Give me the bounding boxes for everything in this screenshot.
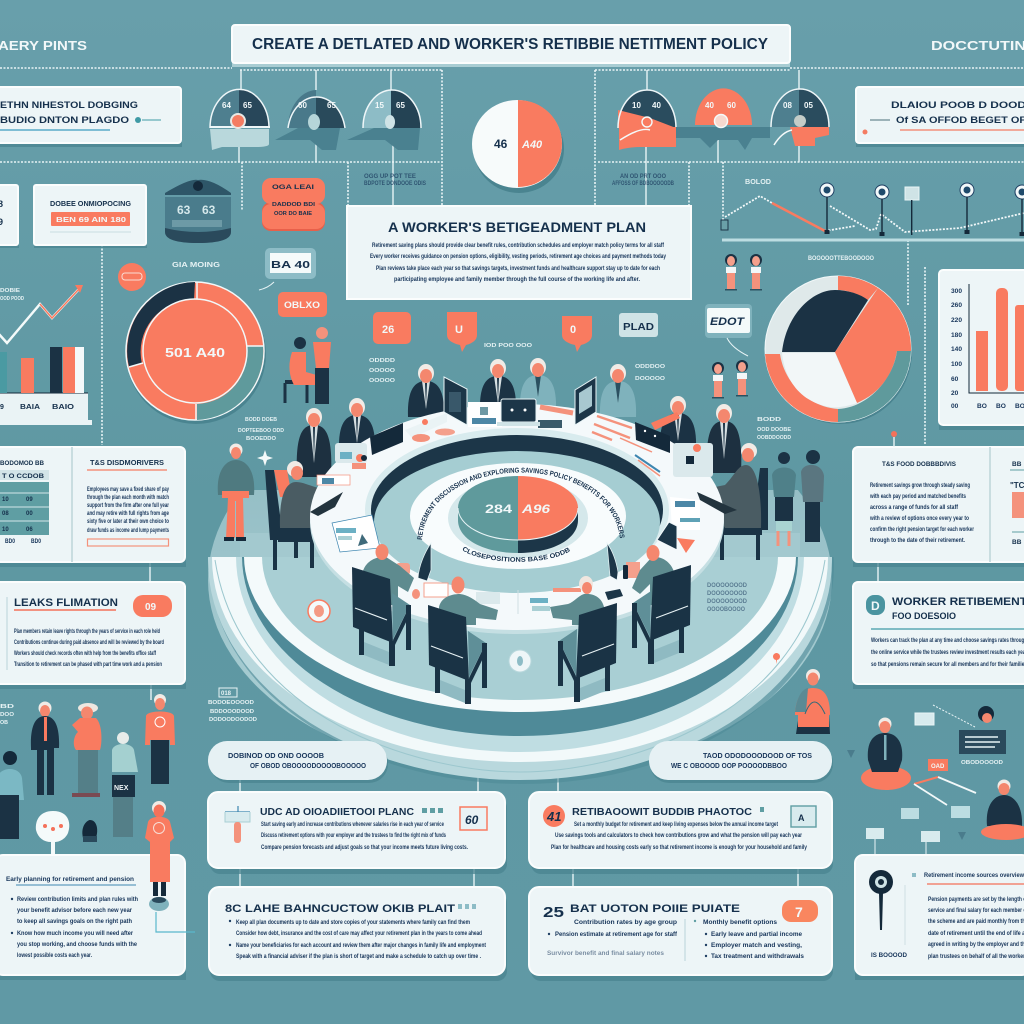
pie chart: right: BOOOOOTTEBOODOOO — [808, 255, 874, 262]
panel: top right note — [856, 87, 1024, 147]
panel: lower left bullets: you stop working, and choose funds with the — [17, 941, 137, 948]
caption: top centre left: BDPOTE DONDOOE ODIS — [364, 180, 426, 187]
chart: left bars and trend: 9 — [0, 404, 4, 411]
centre ring text: RETIREMENT DISCUSSION AND EXPLORING SAVINGS POLICY BENEFITS FOR WORKERS — [417, 468, 624, 540]
icon: dome gauge 5 — [676, 88, 770, 150]
icon: small people mid right — [712, 360, 748, 398]
panel: lower left bullets: Early planning for retirement and pension — [6, 876, 134, 883]
figures: seated meditation group lower right — [861, 705, 1024, 840]
panel: leave flimation: Workers should check records often with help from the benefits office staff — [14, 650, 156, 657]
panel: left table and notes: T&S DISDMORIVERS — [90, 460, 164, 467]
panel: central plan — [347, 206, 691, 299]
panel: left table and notes: BD0 — [31, 538, 41, 545]
panel: basic pension update: Tax treatment and withdrawals — [711, 953, 804, 960]
icon: safe: 63 — [177, 203, 191, 217]
corner label left: AERY PINTS — [0, 38, 87, 53]
panel: left table and notes: Employees may save a fixed share of pay — [87, 486, 169, 493]
chart: left bars and trend — [0, 285, 92, 425]
icon: dome gauge 1 — [210, 89, 270, 150]
panel: top left note: BUDIO DNTON PLAGDO — [0, 115, 129, 126]
callout: coral tag — [278, 292, 327, 317]
panel: objectives plan: UDC AD OIOADIIETOOI PLANC — [260, 807, 414, 818]
icon: dome gauge 3: 65 — [396, 101, 405, 110]
icon: dome gauge 6 — [771, 89, 829, 146]
panel: lower left bullets: Review contribution limits and plan rules with — [17, 896, 138, 903]
pin above right panel — [891, 431, 897, 447]
panel: large bankruptcy plan: Speak with a financial adviser if the plan is short of target and make a schedule to catch up over time . — [236, 953, 481, 960]
panel: objectives plan: Start saving early and increase contributions whenever salaries rise in each year of service — [261, 821, 444, 828]
coral tag row above table: U — [455, 324, 463, 336]
callout: left pill: OF OBOD OBOOOODOOOOBOOOOO — [250, 763, 366, 770]
coral tag row above table: ODDDD — [369, 358, 395, 364]
panel: right bar chart: BO — [996, 403, 1006, 410]
figures: standing pair right — [772, 450, 824, 546]
callout: left pill: DOBINOD OD OND OOOOB — [228, 753, 324, 760]
coral tag row above table: PLAD — [623, 322, 654, 333]
panel: left table and notes: through the plan each month with match — [87, 494, 169, 501]
caption: small left of group: OB — [0, 720, 8, 726]
panel: basic pension update: Pension estimate at retirement age for staff — [555, 931, 678, 938]
icon: dome gauge 1: 65 — [243, 101, 252, 110]
panel: right notes with divider: with each pay period and matched benefits — [869, 493, 966, 500]
caption: top centre right: AFFOSS OF BDBOOOOODB — [612, 180, 674, 187]
illustration: side chairs — [265, 468, 768, 570]
icon: dome gauge 4 — [618, 90, 676, 150]
coral tag row above table: 0 — [570, 324, 576, 336]
donut chart: left: GIA MOING — [172, 262, 221, 269]
panel: large bankruptcy plan — [209, 887, 507, 981]
line chart: top right: BOLOD — [745, 179, 771, 186]
icon: safe: 63 — [202, 203, 216, 217]
caption: above chart small: BDDOOODOOD — [210, 709, 254, 715]
panel: left table and notes: 09 — [26, 497, 33, 503]
figures: group lower left — [0, 694, 175, 839]
panel: basic pension update — [529, 887, 833, 981]
icon: dome gauge 3: 15 — [375, 101, 384, 110]
panel: left table and notes: 06 — [26, 527, 33, 533]
callout: EDOT tag: EDOT — [710, 316, 745, 328]
panel: left table and notes: 10 — [2, 527, 9, 533]
panel: retirement budget: A — [798, 813, 805, 823]
panel: worker retirement: FOO DOESOIO — [892, 611, 956, 621]
caption: small left of group: DOO — [0, 712, 15, 718]
panel: right bar chart: 100 — [951, 361, 962, 368]
caption: right of table: OOBDDOODD — [757, 435, 791, 441]
callout: stacked coral tags — [262, 178, 325, 231]
panel: left table and notes: 08 — [2, 511, 9, 517]
icon: dome gauge 6: 08 — [783, 101, 792, 110]
panel: lower left bullets: lowest possible costs each year. — [17, 952, 92, 959]
caption: under donut — [238, 417, 284, 442]
panel: right notes with divider: through to the date of their retirement. — [870, 537, 965, 544]
diagram: small connected tags: OBODOOOOD — [961, 760, 1003, 766]
panel: right bar chart: 60 — [951, 376, 959, 383]
line chart: top right — [721, 179, 1024, 240]
caption: under donut: BOOEDDO — [246, 436, 277, 442]
coral tag row above table: IOD POO OOO — [484, 343, 533, 349]
panel: retirement budget: RETIBAOOWIT BUDDIB PHAOTOC — [572, 807, 752, 818]
caption: on platform right: DOOOOOOOD — [707, 590, 747, 597]
panel: worker retirement: WORKER RETIBEMENT — [892, 596, 1024, 608]
icon: small people upper right — [725, 254, 762, 290]
panel: right bar chart: BO — [977, 403, 987, 410]
panel: left table and notes: draw funds as income and lump payments — [87, 527, 169, 534]
panel: top right note: Of SA OFFOD BEGET OF — [896, 115, 1024, 126]
pie chart: top centre: A40 — [521, 139, 543, 151]
panel: retirement budget: 41 — [546, 809, 561, 824]
coral tag row above table — [369, 312, 666, 384]
caption: above chart small: BODOEOOOOD — [208, 700, 254, 706]
panel: leave flimation: Plan members retain leave rights through the years of service in each role held — [14, 628, 160, 635]
centre ring lower text: CLOSEPOSITIONS BASE ODDB — [462, 547, 570, 562]
panel: right bar chart: 260 — [951, 302, 962, 309]
panel: basic pension update: 7 — [795, 904, 803, 920]
panel: lower right notes — [855, 855, 1024, 980]
title banner: CREATE A DETLATED AND WORKER'S RETIBBIE NETITMENT POLICY — [252, 36, 768, 53]
icon: dome gauge 4: 40 — [652, 101, 661, 110]
corner label right: DOCCTUTIN — [931, 38, 1024, 53]
panel: objectives plan: 60 — [465, 813, 479, 827]
panel: basic pension update: Survivor benefit and final salary notes — [547, 950, 664, 957]
caption: on platform right — [707, 582, 747, 613]
caption: above chart small: 018 — [221, 691, 232, 697]
panel: top left note — [0, 87, 182, 147]
caption: top centre right — [612, 173, 674, 187]
coral tag row above table: OOOOO — [369, 378, 396, 384]
panel: central plan: Retirement saving plans should provide clear benefit rules, contribution schedules and employer match policy terms for all staff — [372, 242, 665, 249]
pie chart: top centre: 46 — [494, 137, 508, 151]
panel: left table and notes: BD0 — [5, 538, 15, 545]
icon: speech bubble — [36, 811, 97, 865]
caption: on platform right: DOOOOOOOD — [707, 598, 747, 605]
callout: stacked coral tags: OGA LEAI — [272, 184, 314, 191]
panel: large bankruptcy plan: Keep all plan documents up to date and store copies of your statements where family can find them — [236, 919, 470, 926]
panel: retirement budget — [529, 792, 833, 874]
caption: small left of group — [0, 704, 15, 726]
panel: right bar chart: 220 — [951, 317, 962, 324]
donut chart: left — [118, 262, 266, 424]
panel: right notes with divider: with a review of options once every year to — [869, 515, 969, 522]
panel: left table and notes: sixty five or later at their own choice to — [87, 518, 169, 525]
illustration: people and chairs in front of table — [352, 544, 691, 704]
connector lines — [0, 68, 1024, 887]
chart: left bars and trend: BAIO — [52, 404, 75, 411]
panel: deduction card — [34, 185, 147, 248]
figure: coral robe person — [145, 801, 195, 932]
coral tag row above table: 26 — [382, 324, 394, 336]
figures: group lower left: NEX — [114, 785, 129, 792]
callout: right pill: TAOD ODODOOODOOD OF TOS — [703, 753, 812, 760]
figure: woman with bag — [795, 669, 830, 734]
icon: dome gauge 4: 10 — [632, 101, 641, 110]
icon: dome gauge 6: 05 — [804, 101, 813, 110]
table top documents — [317, 402, 713, 614]
callout: value tag — [259, 248, 316, 290]
title banner — [232, 25, 790, 67]
panel: leave flimation: Transition to retirement can be phased with part time work and a pension — [14, 661, 162, 668]
panel: basic pension update: Monthly benefit options — [703, 919, 777, 926]
panel: central plan: Plan reviews take place each year so that savings targets, investment funds and healthcare support stay up to date for each — [376, 265, 660, 272]
panel: large bankruptcy plan: Name your beneficiaries for each account and review them after major changes in family life and employment — [236, 942, 487, 949]
panel: left table and notes: T O CCDOB — [2, 474, 45, 480]
panel: right notes with divider — [853, 447, 1024, 567]
caption: above chart small: DODOODOODOD — [209, 717, 257, 723]
panel: left table and notes: 00 — [26, 511, 33, 517]
panel: lower left bullets — [0, 855, 186, 980]
panel: worker retirement: D — [871, 599, 880, 613]
panel: right bar chart: 00 — [951, 403, 959, 410]
illustration: round platform — [208, 490, 834, 784]
chart: left bars and trend: DOBIE — [0, 288, 20, 294]
icon: location markers on platform — [308, 600, 780, 672]
panel: right notes with divider: T&S FOOD DOBBBDIVIS — [882, 461, 957, 468]
panel: top right note: DLAIOU POOB D DOOD — [891, 100, 1024, 111]
icon: sparkle — [257, 450, 273, 466]
callout: EDOT tag — [705, 304, 752, 356]
illustration: ring table — [310, 402, 724, 634]
caption: top centre left: OGG UP POT TEE — [364, 173, 417, 180]
coral tag row above table: ODDDOO — [635, 364, 666, 370]
icon: dome gauge 2 — [275, 90, 345, 150]
illustration: laptops and monitors — [310, 377, 737, 581]
panel: retirement budget: Use savings tools and calculators to check how contributions grow and what the pension will pay each year — [555, 832, 802, 839]
caption: right of table: BODD — [757, 417, 781, 423]
panel: right bar chart: 20 — [951, 390, 959, 397]
callout: right pill: WE C OBOOOD OOP POOOODBBOO — [671, 763, 788, 770]
icon: dome gauge 5: 60 — [727, 101, 736, 110]
panel: left table and notes: and may retire with full rights from age — [87, 510, 169, 517]
icon: dome gauge 2: 60 — [298, 101, 307, 110]
panel: top left note: ETHN NIHESTOL DOBGING — [0, 100, 138, 111]
figure: standing elder left — [218, 444, 254, 541]
panel: right notes with divider: Retirement savings grow through steady saving — [870, 482, 970, 489]
panel: objectives plan: Compare pension forecasts and adjust goals so that your income meets future living costs. — [261, 844, 468, 851]
coral tag row above table: OOOOO — [369, 368, 396, 374]
icon: dome gauge 2: 65 — [327, 101, 336, 110]
coral tag row above table: DOOOOO — [635, 376, 666, 382]
donut chart: left: 501 A40 — [165, 345, 225, 360]
pie chart: table centre: 284 — [485, 502, 512, 516]
icon: dome gauge 5: 40 — [705, 101, 714, 110]
panel: lower left bullets: to keep all savings goals on the right path — [17, 918, 132, 925]
panel: left table and notes: 10 — [2, 497, 9, 503]
panel: right notes with divider: across a range of funds for all staff — [870, 504, 959, 511]
panel: left table and notes: support from the firm after one full year — [87, 502, 169, 509]
callout: coral tag: OBLXO — [284, 300, 320, 310]
panel: central plan: participating employee and family member through the full course of the working life and after. — [394, 276, 640, 283]
panel: right bar chart: 140 — [951, 346, 962, 353]
panel: basic pension update: Contribution rates by age group — [574, 919, 677, 926]
panel: basic pension update: Early leave and partial income — [711, 931, 802, 938]
callout: stacked coral tags: DADDOD BDI — [272, 202, 316, 208]
panel: right bar chart: 180 — [951, 332, 962, 339]
caption: on platform right: OOOOBOOOO — [707, 606, 745, 613]
callout: right pill — [649, 741, 833, 783]
panel: objectives plan: Discuss retirement options with your employer and the trustees to find the right mix of funds — [261, 832, 446, 839]
panel: right notes with divider: confirm the right pension target for each worker — [870, 526, 974, 533]
panel: large bankruptcy plan: 8C LAHE BAHNCUCTOW OKIB PLAIT — [225, 903, 455, 915]
panel: lower right notes: IS BOOOOD — [871, 952, 907, 959]
panel: large bankruptcy plan: Consider how debt, insurance and the cost of care may affect your retirement plan in the years to come ahead — [236, 930, 482, 937]
caption: top centre right: AN OD PRT OOO — [620, 173, 666, 180]
caption: under donut: BODD DOEB — [245, 417, 277, 423]
panel: left table and notes: BODOMOD BB — [0, 461, 45, 467]
panel: leave flimation: 09 — [145, 602, 157, 613]
panel: central plan: Every worker receives guidance on pension options, eligibility, vesting periods, retirement age choices and payment methods today — [370, 253, 666, 260]
caption: small left of group: BD — [0, 704, 14, 710]
panel: worker retirement — [853, 582, 1024, 689]
caption: top centre left — [364, 173, 426, 187]
panel: left table and notes — [0, 447, 186, 567]
pie chart: table centre — [458, 476, 578, 553]
caption: on platform right: DOOOOOOOD — [707, 582, 747, 589]
diagram: small connected tags — [847, 713, 1003, 857]
callout: stacked coral tags: OOR DO BAIE — [274, 211, 312, 217]
panel: partial left card — [0, 185, 19, 248]
panel: retirement budget: Plan for healthcare and housing costs early so that retirement income is enough for your household and family — [551, 844, 807, 851]
figures: seated and standing pair — [285, 327, 331, 404]
panel: deduction card: DOBEE ONMIOPOCING — [50, 201, 132, 208]
panel: deduction card: BEN 69 AIN 180 — [56, 217, 126, 224]
panel: leave flimation: Contributions continue during paid absence and will be reviewed by the board — [14, 639, 164, 646]
pie chart: table centre: A96 — [521, 502, 550, 516]
chart: left bars and trend: OOD POOD — [0, 296, 24, 302]
panel: leave flimation: LEAKS FLIMATION — [14, 597, 118, 609]
pie chart: right — [765, 255, 912, 424]
caption: under donut: DOPTEEBOO ODD — [238, 428, 284, 434]
callout: value tag: BA 40 — [271, 260, 311, 271]
panel: right bar chart: 300 — [951, 288, 962, 295]
icon: dome gauge 3 — [347, 90, 421, 150]
panel: central plan: A WORKER'S BETIGEADMENT PLAN — [388, 219, 646, 235]
callout: left pill — [208, 741, 388, 783]
illustration: seated people behind table — [280, 358, 761, 528]
icon: safe — [165, 180, 231, 243]
pie chart: top centre — [472, 100, 564, 193]
diagram: small connected tags: OAD — [931, 764, 945, 770]
caption: above chart small — [208, 688, 257, 723]
panel: basic pension update: Employer match and vesting, — [711, 942, 802, 949]
chart: left bars and trend: BAIA — [20, 404, 40, 411]
panel: right notes with divider: BB — [1012, 461, 1022, 468]
panel: objectives plan — [208, 792, 507, 874]
icon: dome gauge 1: 64 — [222, 101, 231, 110]
panel: leave flimation — [0, 582, 186, 689]
panel: basic pension update: BAT UOTON POIIE PUIATE — [570, 903, 740, 915]
panel: basic pension update: 25 — [543, 904, 564, 921]
caption: right of table: OOD DOOBE — [757, 427, 791, 433]
panel: lower left bullets: your benefit advisor before each new year — [17, 907, 132, 914]
panel: retirement budget: Set a monthly budget for retirement and keep living expenses below the annual income target — [574, 821, 779, 828]
panel: right bar chart — [939, 270, 1024, 430]
caption: right of table — [757, 417, 791, 441]
panel: right notes with divider: BB — [1012, 539, 1022, 546]
panel: lower left bullets: Know how much income you will need after — [17, 930, 133, 937]
